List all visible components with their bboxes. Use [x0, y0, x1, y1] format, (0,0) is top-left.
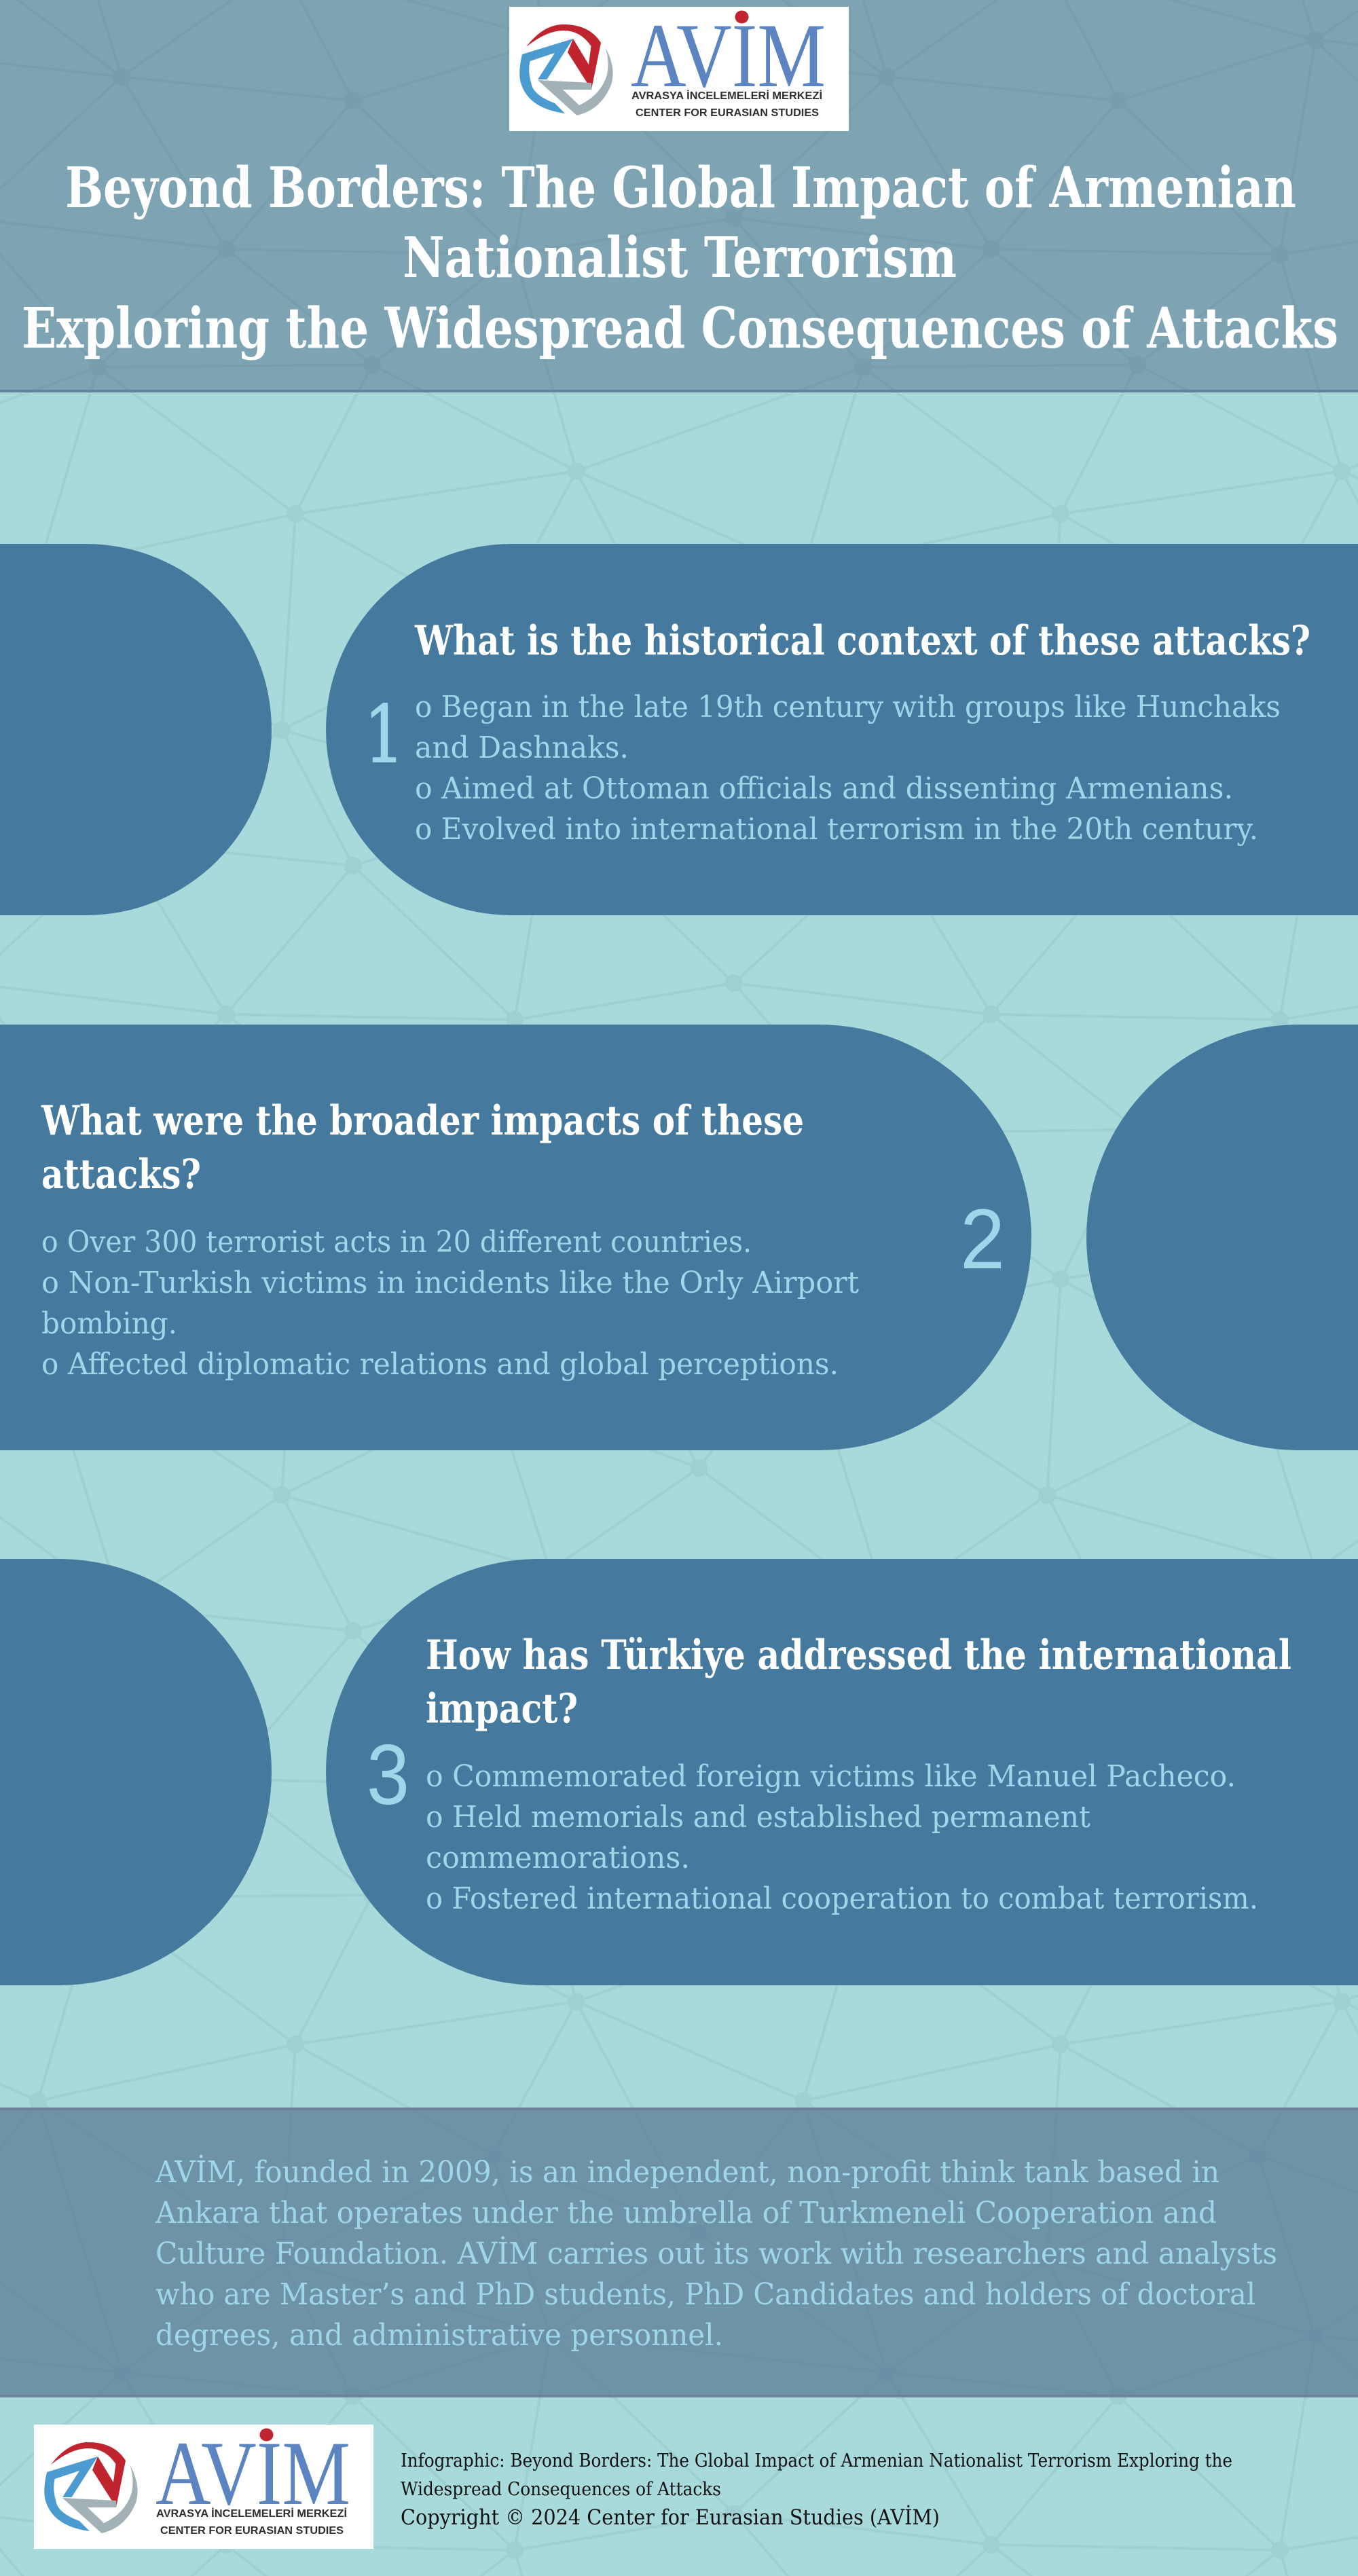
panel: header band	[0, 0, 1358, 392]
heading 3: impact?	[426, 1685, 578, 1733]
body 3: o Held memorials and established permanent	[426, 1800, 1090, 1835]
logo: footer	[34, 2423, 373, 2549]
body 1: o Began in the late 19th century with groups like Hunchaks	[415, 690, 1281, 724]
footer credits: Infographic: Beyond Borders: The Global Impact of Armenian Nationalist Terrorism Exploring the	[401, 2450, 1232, 2471]
body 2: bombing.	[41, 1306, 177, 1341]
body 1: o Aimed at Ottoman officials and dissenting Armenians.	[415, 771, 1233, 806]
decorative left pill 3	[0, 1559, 272, 1985]
logo: footer: CENTER FOR EURASIAN STUDIES	[160, 2525, 344, 2537]
body 1	[415, 690, 1281, 847]
content pill 1	[326, 544, 1358, 915]
body 2	[41, 1225, 859, 1382]
about text: AVİM, founded in 2009, is an independent, non-profit think tank based in	[155, 2154, 1219, 2190]
about text: Culture Foundation. AVİM carries out its work with researchers and analysts	[155, 2235, 1277, 2271]
number 1: 1	[364, 689, 405, 781]
logo: footer: AVIM	[155, 2423, 350, 2524]
body 1: and Dashnaks.	[415, 731, 629, 765]
panel: item 1	[0, 544, 1358, 915]
heading 2	[41, 1097, 804, 1198]
footer credits: Widespread Consequences of Attacks	[401, 2479, 721, 2500]
about text: Ankara that operates under the umbrella of Turkmeneli Cooperation and	[155, 2196, 1217, 2230]
title: Nationalist Terrorism	[403, 225, 957, 291]
panel: item 3	[0, 1559, 1358, 1985]
number 3: 3	[367, 1728, 409, 1822]
logo: footer: AVRASYA İNCELEMELERİ MERKEZİ	[156, 2507, 347, 2520]
about text	[155, 2154, 1277, 2353]
heading 3	[426, 1632, 1291, 1733]
body 2: o Non-Turkish victims in incidents like the Orly Airport	[41, 1266, 859, 1300]
about text: who are Master’s and PhD students, PhD Candidates and holders of doctoral	[155, 2277, 1255, 2312]
body 3: commemorations.	[426, 1841, 690, 1875]
body 2: o Affected diplomatic relations and global perceptions.	[41, 1347, 839, 1382]
panel: item 2	[0, 1025, 1358, 1450]
decorative right pill 2	[1086, 1025, 1358, 1450]
content pill 3	[326, 1559, 1358, 1985]
panel: about AVIM	[0, 2108, 1358, 2397]
body 3: o Fostered international cooperation to combat terrorism.	[426, 1881, 1258, 1916]
content pill 2	[0, 1025, 1031, 1450]
logo: header: CENTER FOR EURASIAN STUDIES	[636, 107, 819, 119]
heading 2: attacks?	[41, 1151, 201, 1198]
heading 2: What were the broader impacts of these	[41, 1097, 804, 1145]
body 2: o Over 300 terrorist acts in 20 different countries.	[41, 1225, 752, 1259]
number 2: 2	[960, 1192, 1005, 1287]
body 3: o Commemorated foreign victims like Manuel Pacheco.	[426, 1759, 1236, 1794]
logo: header: AVRASYA İNCELEMELERİ MERKEZİ	[631, 90, 822, 102]
title	[22, 155, 1338, 361]
logo: header: AVIM	[631, 5, 826, 107]
footer credits: Copyright © 2024 Center for Eurasian Studies (AVİM)	[401, 2504, 940, 2530]
body 1: o Evolved into international terrorism in the 20th century.	[415, 812, 1258, 847]
decorative left pill 1	[0, 544, 272, 915]
footer credits	[401, 2450, 1232, 2530]
body 3	[426, 1759, 1258, 1916]
logo: header	[509, 5, 849, 131]
about text: degrees, and administrative personnel.	[155, 2318, 723, 2353]
